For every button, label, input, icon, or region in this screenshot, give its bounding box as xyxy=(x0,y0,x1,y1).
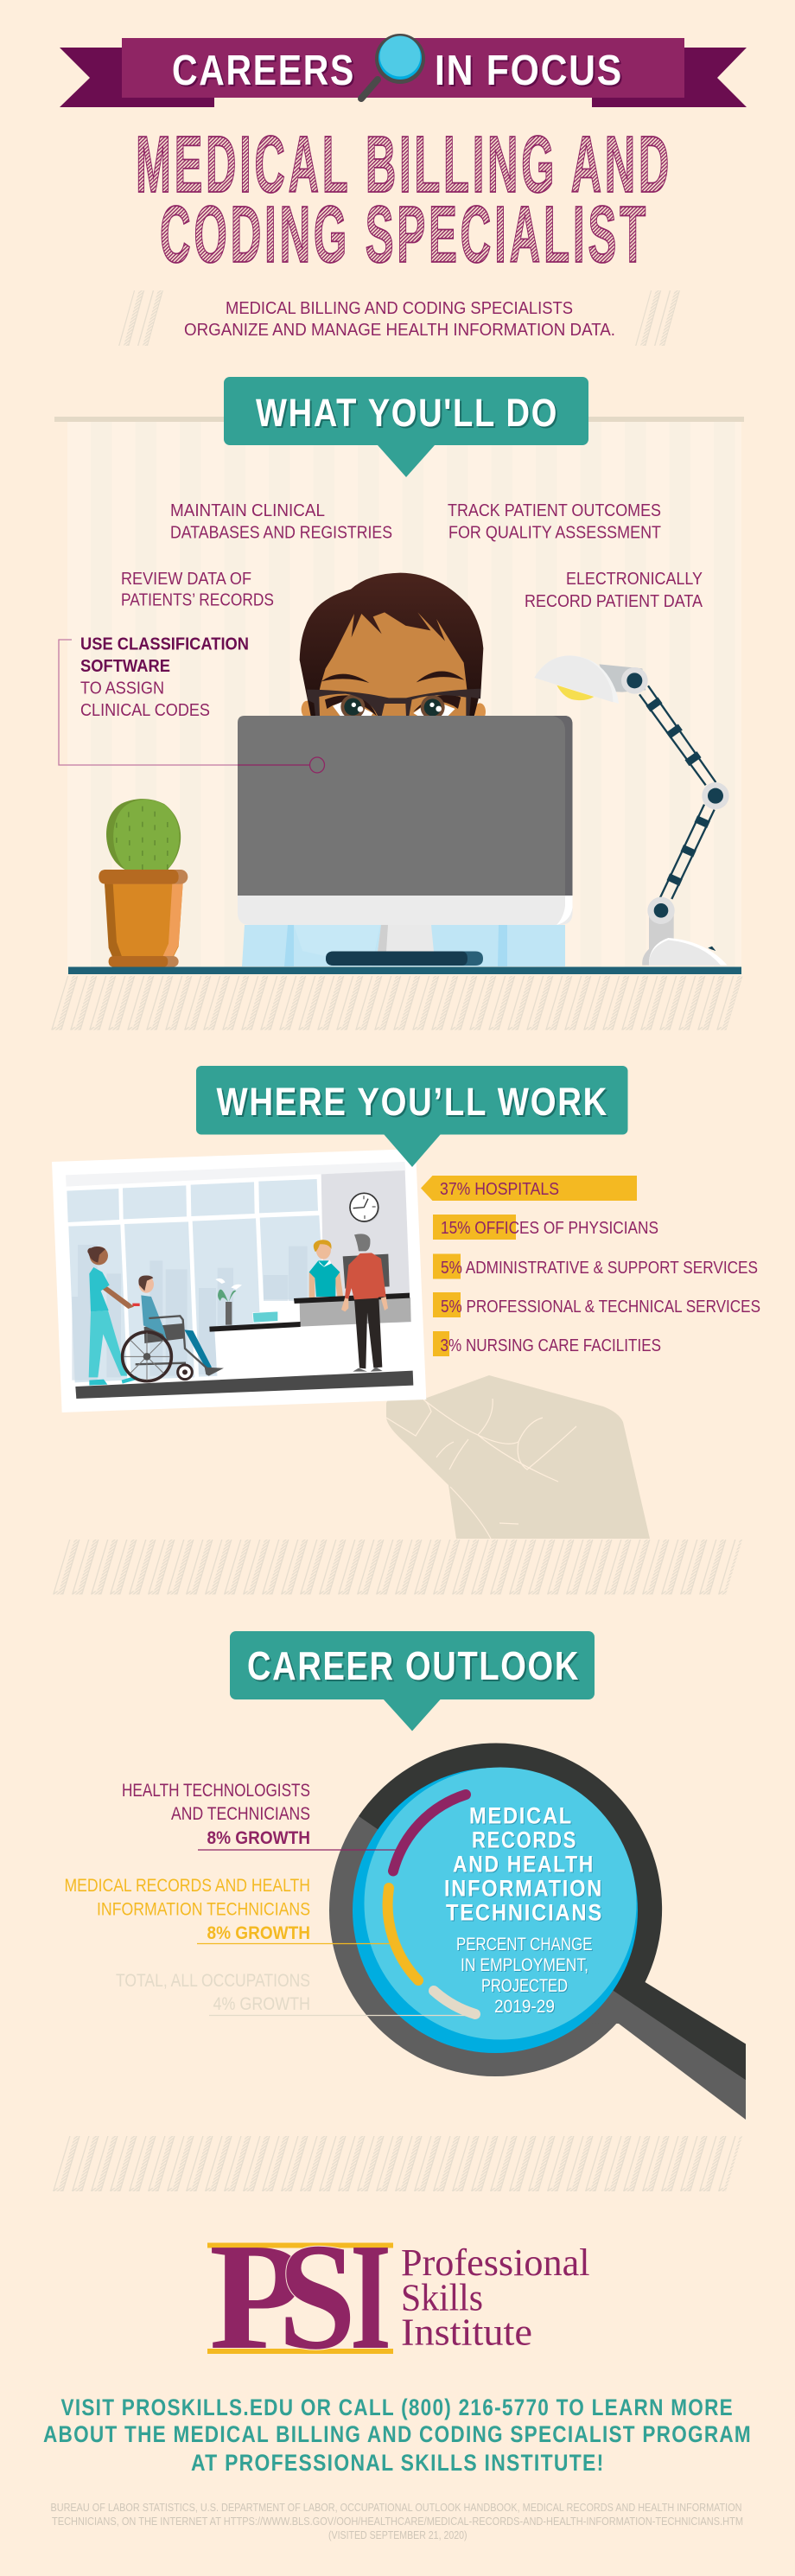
intro text xyxy=(184,298,615,340)
label: health technologists: HEALTH TECHNOLOGISTS xyxy=(122,1781,310,1801)
lens heading: TECHNICIANS xyxy=(446,1900,603,1926)
intro text: MEDICAL BILLING AND CODING SPECIALISTS xyxy=(226,298,573,318)
icon: cactus xyxy=(99,799,188,967)
nurse xyxy=(87,1247,140,1386)
receptionist xyxy=(309,1240,343,1298)
bar: nursing: 3% NURSING CARE FACILITIES xyxy=(441,1336,661,1355)
banner xyxy=(60,34,747,107)
logo: professional skills institute xyxy=(207,2212,589,2382)
label: medical records technicians: 8% GROWTH xyxy=(207,1923,310,1943)
person torso xyxy=(242,925,565,966)
logo: professional skills institute: P xyxy=(209,2212,304,2382)
tasks: record data: ELECTRONICALLY xyxy=(566,569,703,589)
title xyxy=(136,119,672,279)
logo: professional skills institute: I xyxy=(350,2212,391,2382)
vase and flowers xyxy=(215,1278,242,1325)
label: medical records technicians: MEDICAL RECORDS AND HEALTH xyxy=(64,1876,310,1896)
lens subtext: PROJECTED xyxy=(481,1976,568,1996)
photo: healthcare office xyxy=(52,1149,426,1412)
icon: desk lamp xyxy=(534,655,729,966)
tasks: review data: REVIEW DATA OF xyxy=(121,569,251,589)
hatched stripe divider 3 xyxy=(53,2136,742,2191)
call to action: AT PROFESSIONAL SKILLS INSTITUTE! xyxy=(191,2450,605,2476)
heading: career outlook xyxy=(230,1631,595,1731)
tasks: track outcomes xyxy=(448,501,661,543)
lens subtext: 2019-29 xyxy=(494,1997,555,2017)
illustration: hand holding photo xyxy=(386,1375,650,1539)
lens heading: MEDICAL xyxy=(469,1803,573,1829)
arc: all occupations xyxy=(434,1991,475,2014)
hatched stripe divider 1 xyxy=(51,976,743,1030)
tasks: track outcomes: TRACK PATIENT OUTCOMES xyxy=(448,501,661,520)
heading: where you'll work: WHERE YOU’LL WORK xyxy=(216,1080,608,1124)
tasks: maintain databases: DATABASES AND REGISTRIES xyxy=(170,522,392,543)
logo wordmark: Institute xyxy=(401,2311,532,2353)
tasks: classification software: CLINICAL CODES xyxy=(80,700,210,720)
tasks: record data xyxy=(525,569,703,611)
bar: nursing xyxy=(433,1331,661,1356)
heading: where you'll work xyxy=(196,1066,627,1167)
man at the desk xyxy=(341,1234,388,1372)
tasks: review data: PATIENTS’ RECORDS xyxy=(121,590,274,610)
label: health technologists xyxy=(122,1781,396,1850)
lens heading: AND HEALTH xyxy=(453,1852,595,1878)
tasks: maintain databases xyxy=(170,501,392,543)
lens heading xyxy=(444,1803,603,1926)
monitor xyxy=(238,716,572,966)
bar chart: workplaces xyxy=(421,1176,760,1356)
lens subtext xyxy=(456,1935,593,2017)
bar: hospitals xyxy=(421,1176,637,1201)
decorative slashes left xyxy=(118,290,163,346)
label: medical records technicians xyxy=(64,1876,393,1943)
tasks: record data: RECORD PATIENT DATA xyxy=(525,591,703,611)
hatched stripe divider 2 xyxy=(53,1540,742,1594)
bar: offices of physicians: 15% OFFICES OF PHYSICIANS xyxy=(441,1218,658,1238)
callout line xyxy=(59,640,325,773)
logo wordmark: Skills xyxy=(401,2277,483,2318)
tasks: classification software: SOFTWARE xyxy=(80,656,170,676)
tasks: classification software: TO ASSIGN xyxy=(80,678,164,698)
skyline xyxy=(72,1245,308,1380)
heading: career outlook: CAREER OUTLOOK xyxy=(247,1643,580,1688)
tasks: maintain databases: MAINTAIN CLINICAL xyxy=(170,501,325,520)
panel: what you'll do scene xyxy=(54,417,744,974)
logo wordmark xyxy=(401,2241,589,2353)
bar: offices of physicians xyxy=(433,1215,658,1240)
lens heading: RECORDS xyxy=(472,1827,577,1853)
lens heading: INFORMATION xyxy=(444,1876,603,1902)
bar: hospitals: 37% HOSPITALS xyxy=(440,1179,559,1199)
window panes xyxy=(67,1179,324,1382)
tasks: track outcomes: FOR QUALITY ASSESSMENT xyxy=(448,522,661,543)
icon: small magnifying glass xyxy=(361,34,425,99)
lens subtext: PERCENT CHANGE xyxy=(456,1935,593,1954)
wall xyxy=(67,422,741,967)
tasks: review data xyxy=(121,569,274,610)
label: all occupations xyxy=(116,1971,472,2016)
heading: what you'll do xyxy=(224,377,588,477)
logo wordmark: Professional xyxy=(401,2241,589,2284)
label: all occupations: 4% GROWTH xyxy=(213,1994,310,2014)
source note xyxy=(50,2501,743,2541)
label: all occupations: TOTAL, ALL OCCUPATIONS xyxy=(116,1971,310,1991)
intro text: ORGANIZE AND MANAGE HEALTH INFORMATION DATA. xyxy=(184,320,615,340)
counter xyxy=(214,1322,412,1379)
arc: medical records xyxy=(388,1888,418,1980)
tasks: classification software: USE CLASSIFICATION xyxy=(80,634,249,654)
call to action xyxy=(43,2394,752,2476)
banner text: in focus: IN FOCUS xyxy=(435,48,623,94)
decorative slashes right xyxy=(635,290,680,346)
banner text: careers: CAREERS xyxy=(172,48,355,94)
arc: health technologists xyxy=(393,1795,466,1871)
label: medical records technicians: INFORMATION TECHNICIANS xyxy=(97,1900,310,1919)
source note: (VISITED SEPTEMBER 21, 2020) xyxy=(328,2528,467,2541)
clock xyxy=(350,1193,379,1222)
person head xyxy=(300,573,486,720)
patient in wheelchair xyxy=(123,1276,224,1381)
lens subtext: IN EMPLOYMENT, xyxy=(461,1955,588,1975)
desk xyxy=(68,966,741,974)
label: health technologists: 8% GROWTH xyxy=(207,1828,310,1848)
tasks: classification software xyxy=(80,634,249,720)
heading: what you'll do: WHAT YOU'LL DO xyxy=(256,391,558,435)
logo: professional skills institute: S xyxy=(278,2212,356,2382)
chart: large magnifying glass xyxy=(329,1743,746,2120)
label: health technologists: AND TECHNICIANS xyxy=(171,1804,310,1824)
